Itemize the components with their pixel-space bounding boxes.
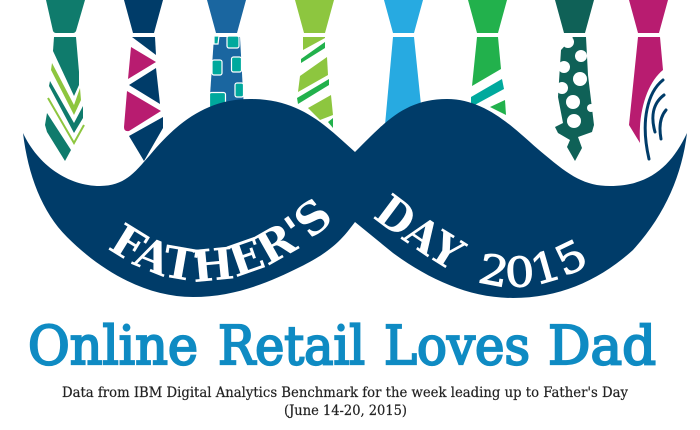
tie 6: green with teal stripe <box>468 0 507 115</box>
subtitle line 1: Data from IBM Digital Analytics Benchmark for the week leading up to Father's Day <box>62 385 628 401</box>
moustache <box>23 99 687 298</box>
tie 5: sky blue <box>384 0 423 125</box>
title: Retail <box>218 316 365 377</box>
moustache text: Day: DAY <box>374 192 468 268</box>
moustache text: 2015: 2015 <box>479 239 585 288</box>
title <box>28 316 656 377</box>
tie 3: blue with teal blocks <box>207 0 246 110</box>
moustache text: Father's: FATHER'S <box>108 198 330 282</box>
tie 8: magenta with navy arcs <box>629 0 668 159</box>
title: Dad <box>548 316 656 377</box>
tie 2: navy and magenta triangles <box>124 0 163 161</box>
subtitle line 2: (June 14-20, 2015) <box>284 403 407 419</box>
tie 7: dark green with polka dots <box>555 0 595 161</box>
tie 1: teal chevrons <box>45 0 85 161</box>
tie 4: lime with green stripes <box>295 0 334 128</box>
title: Loves <box>384 316 530 377</box>
title: Online <box>28 316 198 377</box>
